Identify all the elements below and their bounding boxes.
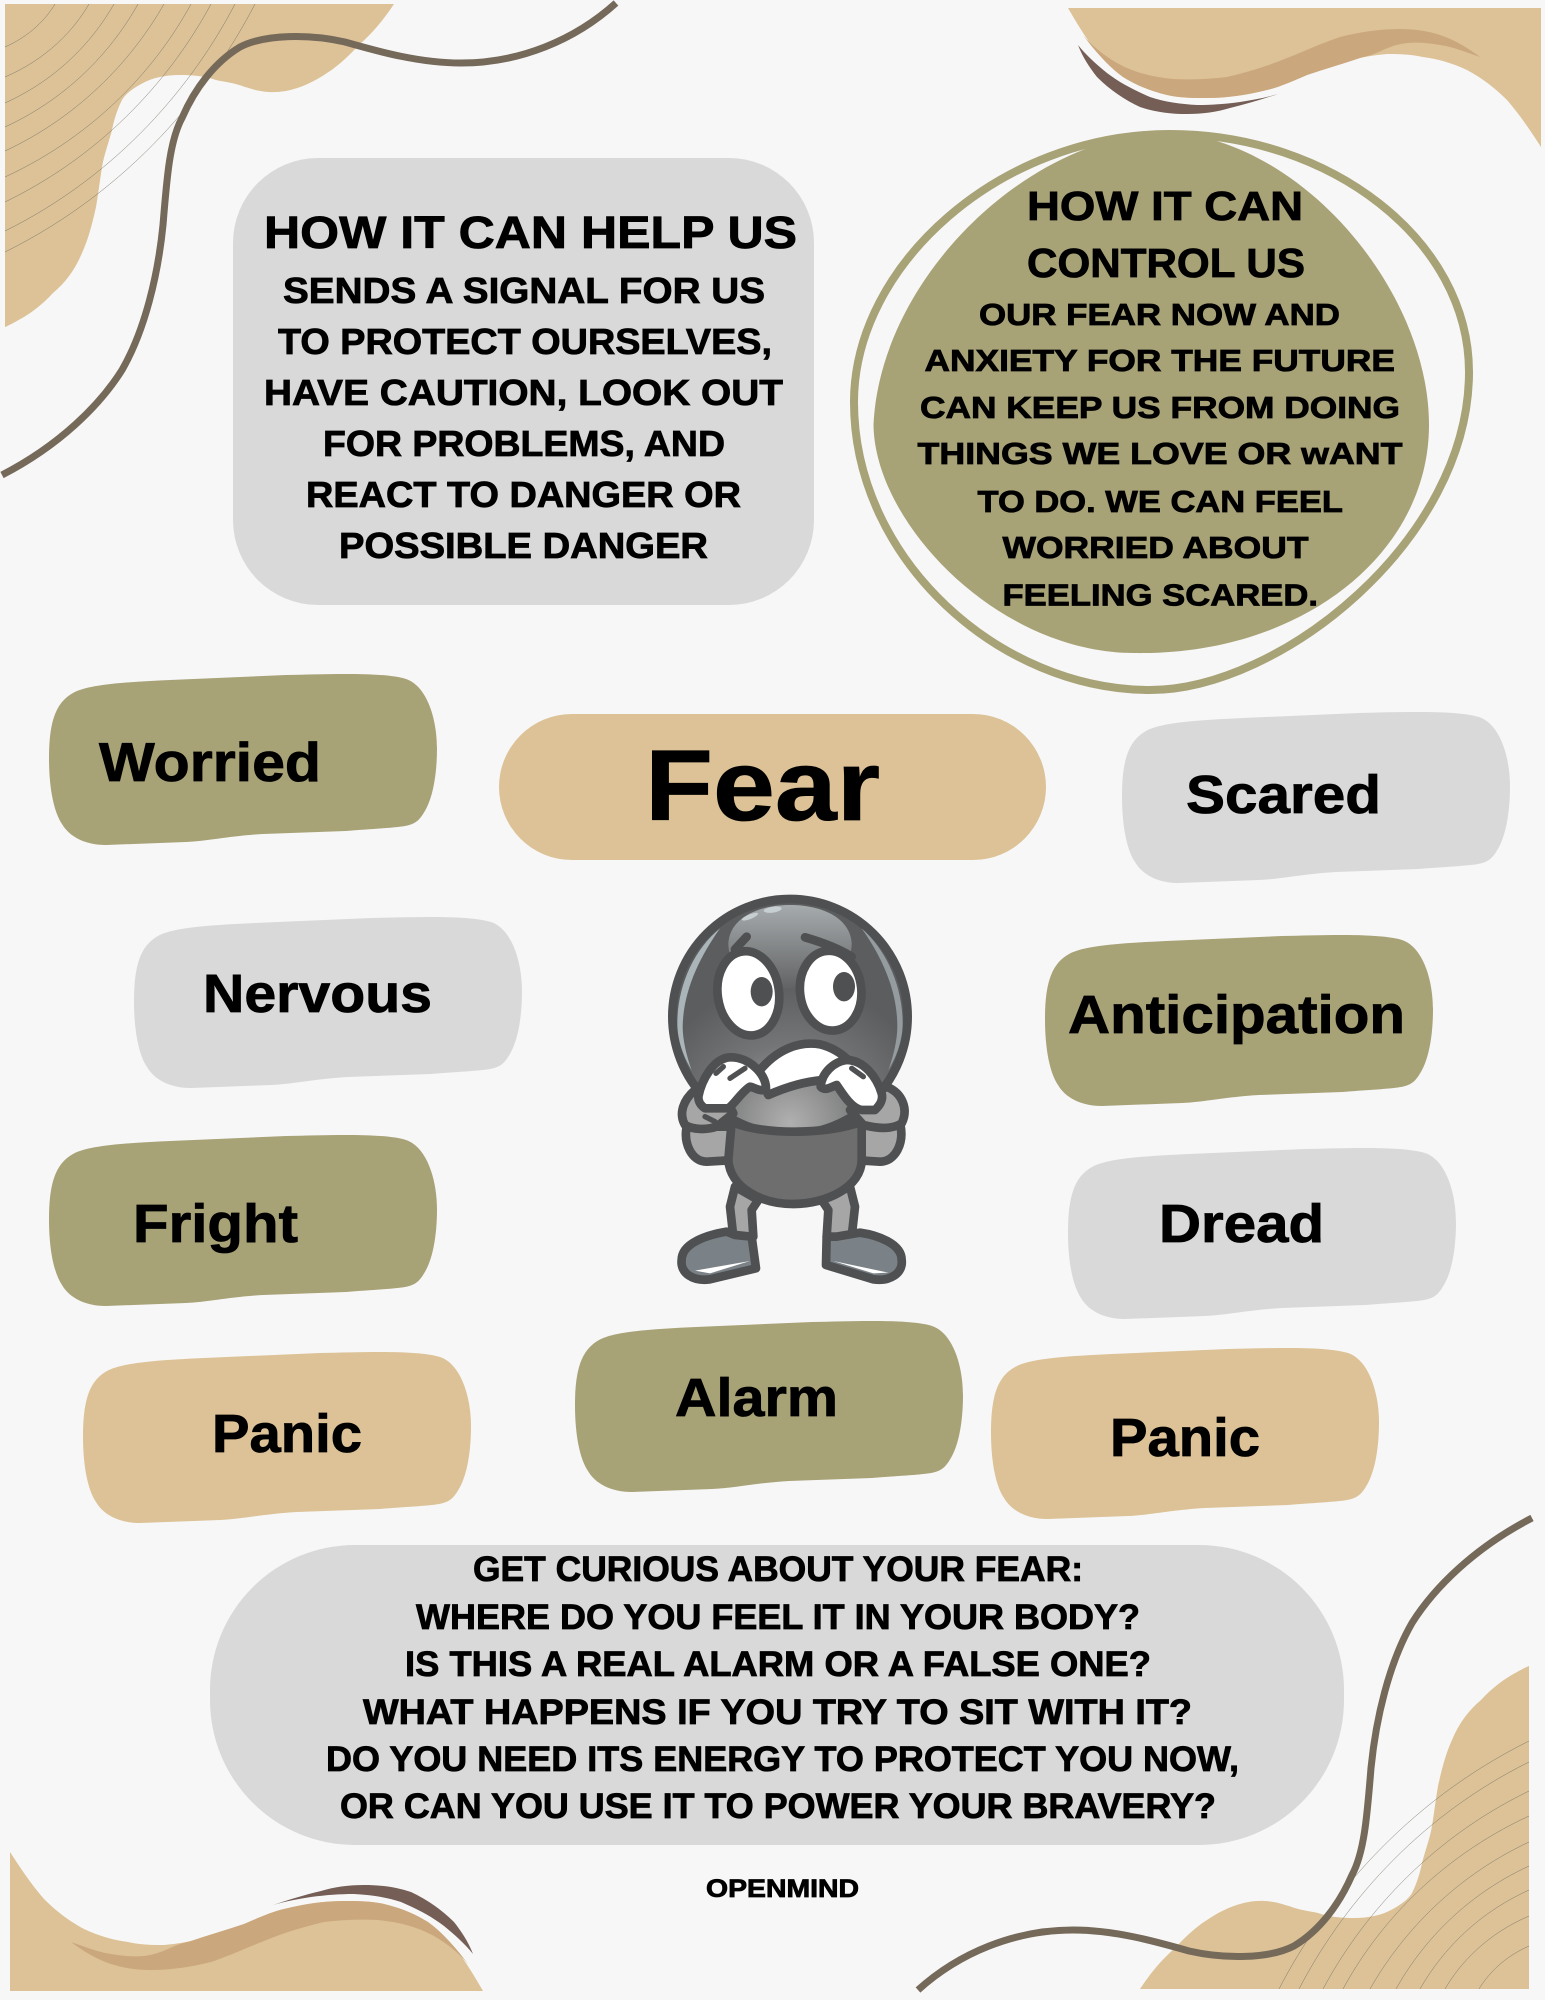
text block: questions: OR CAN YOU USE IT TO POWER YOUR BRAVERY? [340, 1787, 1216, 1826]
icon: scared cartoon character [672, 899, 908, 1280]
text block: help description: SENDS A SIGNAL FOR US [283, 270, 765, 311]
title: Fear: Fear [645, 730, 880, 842]
text block: help description: POSSIBLE DANGER [339, 525, 708, 566]
text block: control description: FEELING SCARED. [1002, 578, 1318, 612]
label: Worried [49, 674, 437, 845]
label: Scared: Scared [1186, 765, 1381, 825]
text block: control description [918, 297, 1403, 612]
text block: questions: IS THIS A REAL ALARM OR A FALSE ONE? [405, 1645, 1151, 1684]
heading: how it can help us: HOW IT CAN HELP US [264, 207, 797, 258]
left hand [698, 1057, 766, 1122]
label: Nervous: Nervous [203, 964, 432, 1024]
text block: help description: HAVE CAUTION, LOOK OUT [264, 372, 783, 413]
label: Scared [1122, 712, 1510, 883]
shoe soles [695, 1261, 888, 1273]
panel: how it can control us [854, 132, 1469, 690]
body [728, 1122, 862, 1204]
heading: how it can control us: HOW IT CAN [1027, 183, 1303, 229]
panel: get curious questions [210, 1545, 1344, 1845]
text block: questions: GET CURIOUS ABOUT YOUR FEAR: [473, 1550, 1083, 1589]
label: Panic left [83, 1352, 471, 1523]
text block: help description: FOR PROBLEMS, AND [323, 423, 725, 464]
panel: how it can help us [233, 158, 814, 605]
text block: control description: THINGS WE LOVE OR wANT [918, 436, 1403, 471]
left eye [712, 947, 785, 1040]
text block: control description: WORRIED ABOUT [1002, 530, 1309, 565]
text block: questions [326, 1550, 1239, 1826]
text block: help description [264, 270, 783, 566]
legs [730, 1187, 855, 1237]
label: Nervous [134, 917, 522, 1088]
label: Dread: Dread [1159, 1194, 1324, 1254]
text block: questions: WHAT HAPPENS IF YOU TRY TO SIT WITH IT? [363, 1693, 1192, 1732]
ring outline [854, 134, 1469, 690]
label: Dread [1068, 1148, 1456, 1319]
credit: OPENMIND: OPENMIND [706, 1875, 859, 1903]
heading: how it can control us: CONTROL US [1027, 240, 1305, 286]
label: Anticipation [1045, 935, 1433, 1106]
label: Panic right [991, 1348, 1379, 1519]
label: Alarm [575, 1321, 963, 1492]
mouth [757, 1044, 850, 1095]
upper arms [686, 1123, 901, 1162]
label: Worried: Worried [99, 731, 321, 793]
text block: questions: WHERE DO YOU FEEL IT IN YOUR BODY? [416, 1598, 1140, 1637]
decoration: bottom-left corner wave [10, 1852, 483, 1991]
head rim highlights [677, 905, 903, 1070]
decoration: bottom-right corner shape with curve [918, 1518, 1532, 1990]
text block: help description: TO PROTECT OURSELVES, [278, 321, 772, 362]
right eye [796, 948, 865, 1034]
decoration: top-left corner shape with curve [2, 3, 616, 475]
label: Alarm: Alarm [675, 1368, 838, 1428]
head [672, 899, 908, 1134]
label: Panic right: Panic [1110, 1408, 1260, 1468]
olive circle [874, 132, 1429, 653]
label: Anticipation: Anticipation [1068, 985, 1405, 1045]
heading: how it can control us [1027, 183, 1305, 286]
left cuff [682, 1090, 733, 1129]
right cuff [850, 1087, 905, 1128]
right hand [821, 1060, 882, 1110]
title: Fear [499, 714, 1046, 860]
text block: control description: ANXIETY FOR THE FUTURE [924, 343, 1395, 378]
text block: help description: REACT TO DANGER OR [306, 474, 741, 515]
text block: questions: DO YOU NEED ITS ENERGY TO PROTECT YOU NOW, [326, 1740, 1239, 1779]
shoes [682, 1232, 902, 1280]
text block: control description: OUR FEAR NOW AND [979, 297, 1340, 332]
decoration: top-right corner wave [1068, 8, 1541, 147]
text block: control description: CAN KEEP US FROM DOING [920, 390, 1400, 425]
eyebrows [735, 937, 852, 957]
label: Fright [49, 1135, 437, 1306]
label: Fright: Fright [133, 1194, 298, 1254]
text block: control description: TO DO. WE CAN FEEL [978, 484, 1343, 519]
label: Panic left: Panic [212, 1404, 362, 1464]
